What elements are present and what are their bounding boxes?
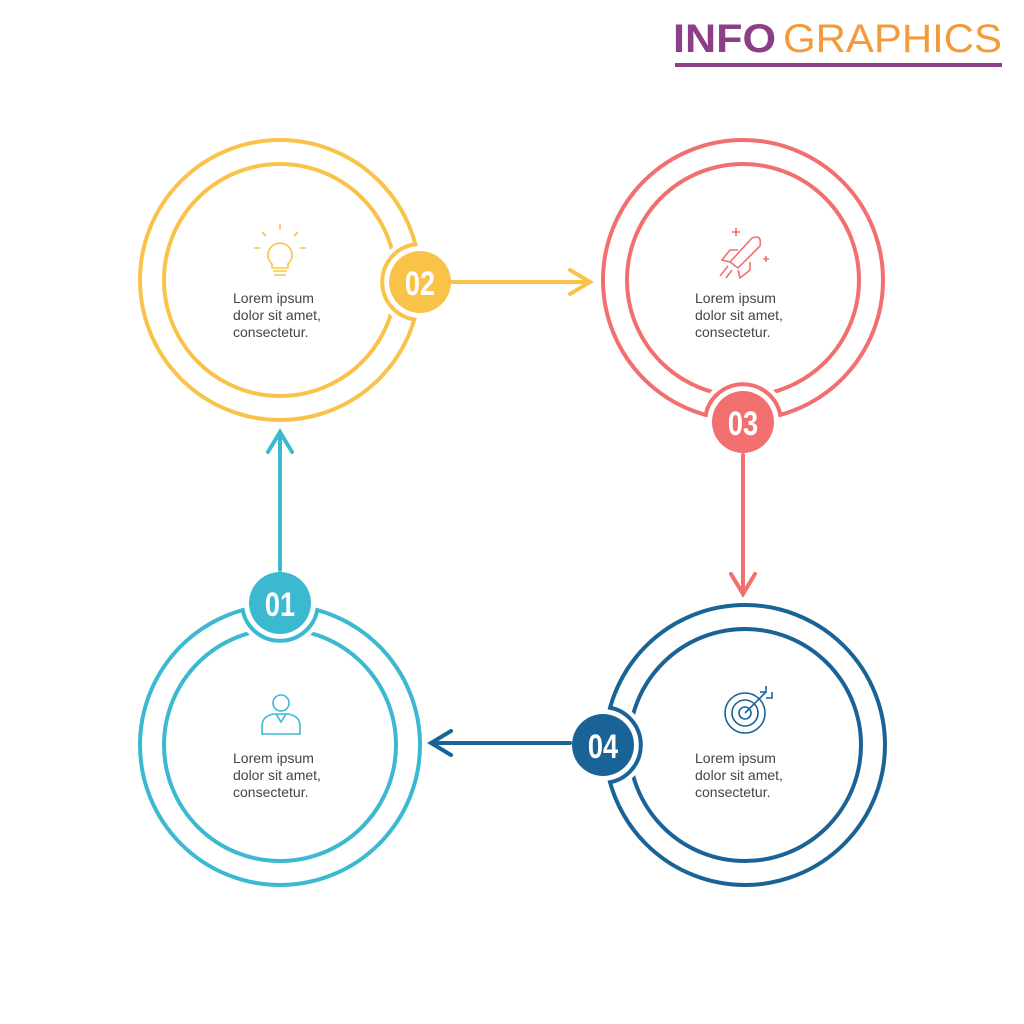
text block 02: Lorem ipsum bbox=[233, 290, 314, 306]
icon: person bbox=[262, 695, 300, 734]
text block 01: consectetur. bbox=[233, 784, 308, 800]
text block 03: consectetur. bbox=[695, 324, 770, 340]
panel: step 03 red bbox=[603, 140, 883, 466]
badge 03: 03 bbox=[728, 404, 758, 443]
panel: step 02 yellow bbox=[140, 140, 464, 420]
title: INFO bbox=[673, 17, 776, 61]
arrow: 02 to 03 bbox=[451, 270, 590, 294]
arrow: 01 to 02 bbox=[268, 432, 292, 570]
badge 02 bbox=[389, 251, 451, 313]
text block 01: Lorem ipsum bbox=[233, 750, 314, 766]
text block 02: dolor sit amet, bbox=[233, 307, 321, 323]
title: GRAPHICS bbox=[783, 17, 1002, 61]
text block 04: consectetur. bbox=[695, 784, 770, 800]
text block 04: Lorem ipsum bbox=[695, 750, 776, 766]
badge 03 bbox=[712, 391, 774, 453]
panel: step 04 blue bbox=[559, 605, 885, 885]
icon: light bulb bbox=[254, 224, 306, 275]
panel: step 01 cyan bbox=[140, 559, 420, 885]
badge 04: 04 bbox=[588, 727, 618, 766]
text block 02: consectetur. bbox=[233, 324, 308, 340]
badge 01: 01 bbox=[265, 585, 295, 624]
icon: rocket bbox=[720, 228, 769, 278]
text block 04: dolor sit amet, bbox=[695, 767, 783, 783]
text block 03: Lorem ipsum bbox=[695, 290, 776, 306]
text block 03: dolor sit amet, bbox=[695, 307, 783, 323]
icon: target bbox=[725, 686, 772, 733]
title bbox=[673, 17, 1002, 67]
arrow: 04 to 01 bbox=[431, 731, 570, 755]
text block 01: dolor sit amet, bbox=[233, 767, 321, 783]
arrow: 03 to 04 bbox=[731, 455, 755, 594]
badge 01 bbox=[249, 572, 311, 634]
badge 02: 02 bbox=[405, 264, 435, 303]
badge 04 bbox=[572, 714, 634, 776]
